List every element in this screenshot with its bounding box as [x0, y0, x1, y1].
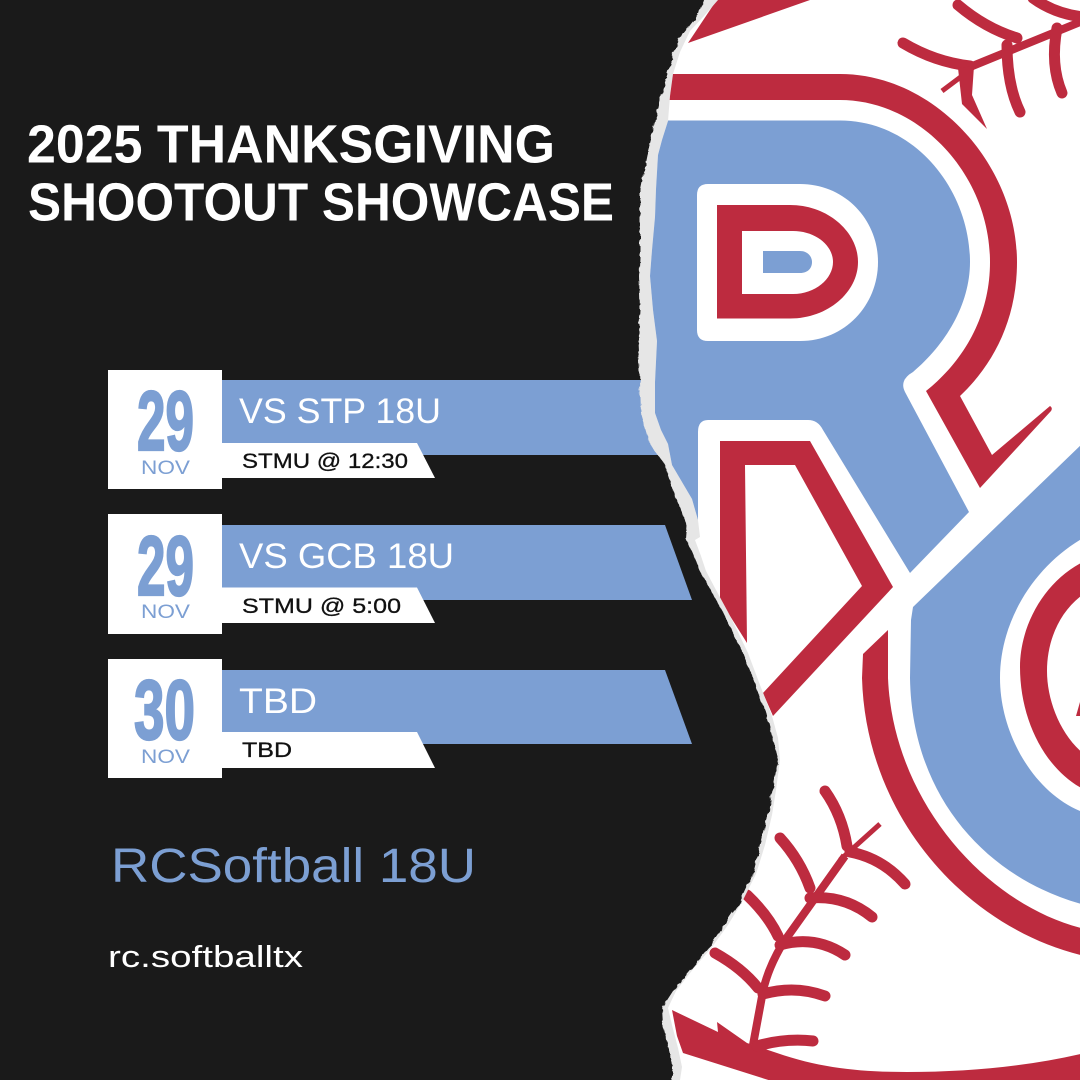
counter of R: red D	[717, 205, 858, 318]
letter R red leg outline	[720, 441, 893, 716]
paper base	[630, 0, 1080, 1080]
team name: RCSoftball 18U	[111, 840, 476, 893]
panel: game 1: VS STP 18U	[239, 392, 441, 431]
letter C blue body	[910, 441, 1080, 905]
panel: game 3: NOV	[141, 747, 190, 768]
panel: game 3: TBD	[242, 739, 292, 762]
top seam stitches	[903, 0, 1080, 112]
panel: game 2: STMU @ 5:00	[242, 595, 401, 618]
bottom seam stitches	[715, 791, 905, 1046]
letter C inner tip	[1076, 702, 1080, 716]
bottom ball outline	[672, 1010, 1080, 1080]
panel: game 2: 29	[137, 519, 194, 613]
panel: game 2: NOV	[141, 602, 190, 623]
panel: game 1: NOV	[141, 458, 190, 479]
panel: game 3: 30	[134, 663, 195, 757]
counter of R: inner white	[742, 231, 833, 294]
counter of R: inner blue	[763, 251, 812, 273]
panel: game 2: VS GCB 18U	[239, 537, 454, 576]
letter C outer red arc	[862, 630, 1080, 956]
title	[27, 114, 614, 232]
letter R outer red outline	[640, 74, 1052, 488]
social handle: rc.softballtx	[108, 939, 304, 974]
counter of R: white border	[697, 184, 878, 341]
panel: game 2	[108, 514, 692, 634]
torn paper edge	[638, 0, 900, 1080]
top red wedge	[688, 0, 820, 43]
title: 2025 THANKSGIVING	[27, 114, 555, 174]
letter C inner red ring	[1020, 561, 1080, 790]
panel: game 1	[108, 370, 692, 489]
logo artwork on torn paper	[630, 0, 1080, 1080]
panel: game 3: TBD	[239, 682, 317, 721]
panel: game 1: STMU @ 12:30	[242, 450, 408, 473]
letter R blue body	[630, 120, 970, 573]
panel: game 1: 29	[137, 374, 194, 468]
title: SHOOTOUT SHOWCASE	[28, 172, 614, 232]
panel: game 3	[108, 659, 692, 778]
